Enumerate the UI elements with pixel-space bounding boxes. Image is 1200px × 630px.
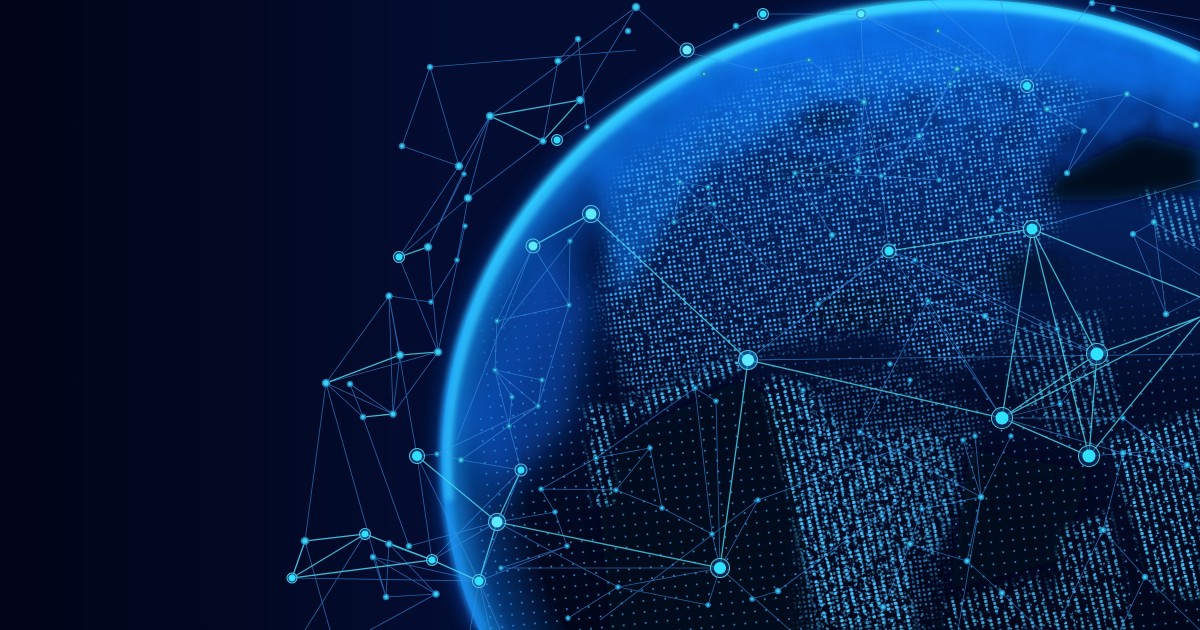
bright rim — [444, 3, 1200, 630]
network lines: bright — [292, 100, 1200, 581]
dense land dots — [590, 43, 1094, 630]
striped land dots — [582, 186, 1200, 630]
globe body — [440, 0, 1200, 630]
sparse ocean dots — [480, 240, 1200, 630]
network lines: faint — [292, 0, 1200, 630]
outer halo of the globe — [442, 0, 1200, 630]
network nodes: large ringed — [287, 8, 1108, 588]
cloudy glow over northern land — [440, 0, 1200, 500]
network nodes: small — [302, 0, 1198, 620]
globe — [442, 0, 1200, 630]
inner rim glow — [440, 0, 1200, 630]
dark ocean patches — [600, 108, 1200, 630]
illustration: digital globe with network — [286, 0, 1200, 630]
